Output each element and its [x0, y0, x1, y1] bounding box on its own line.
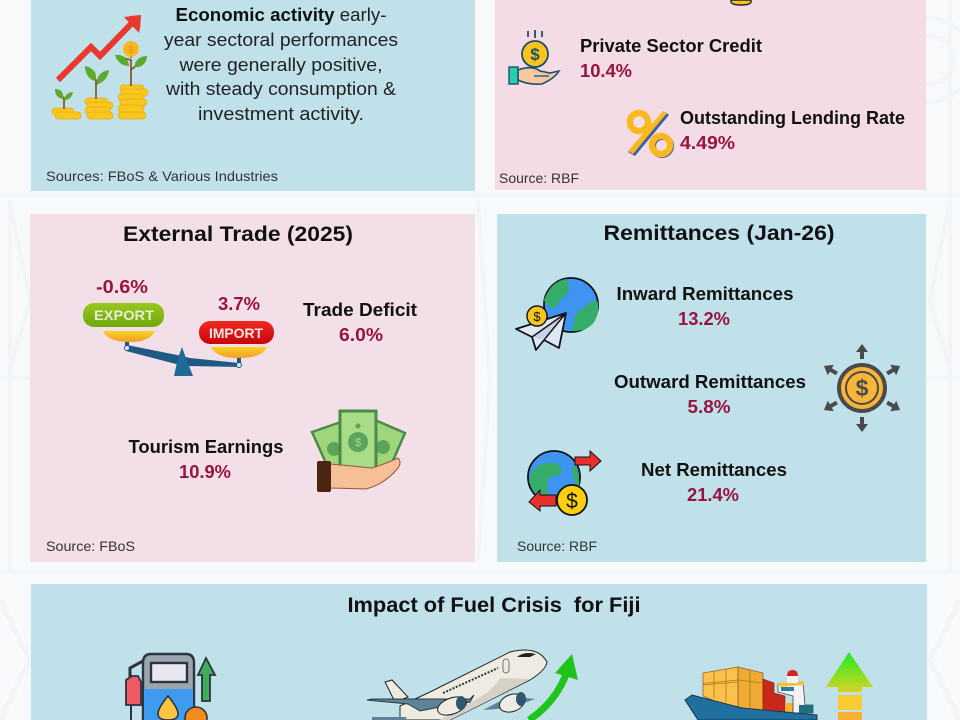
heading: remittances: Remittances (Jan-26) [604, 222, 834, 245]
icon: coin stack fragment [731, 0, 751, 5]
icon: growth arrow with coin plants: $ [128, 45, 134, 56]
stat: trade deficit: 6.0% [339, 325, 383, 345]
text: economic activity summary: Economic activity early- [176, 5, 386, 25]
stat: inward remittances: 13.2% [678, 309, 730, 329]
icon: globe with exchange arrows: $ [566, 490, 578, 513]
icon: fuel pump with rising price [126, 654, 215, 720]
icon: hand holding coin: $ [530, 45, 540, 64]
stat: private sector credit: 10.4% [580, 61, 632, 81]
stat: outward remittances: 5.8% [688, 397, 730, 417]
panel: economic activity [31, 0, 475, 191]
icon: globe with paper plane: $ [533, 309, 541, 324]
source note: Source: FBoS [46, 538, 135, 554]
text: economic activity summary: with steady consumption & [165, 79, 396, 99]
panel: credit and lending [495, 0, 926, 190]
stat: import change: 3.7% [218, 294, 260, 314]
stat: tourism earnings [128, 437, 284, 482]
stat: net remittances: Net Remittances [641, 460, 787, 480]
stat: outstanding lending rate [680, 108, 905, 153]
icon: growth arrow with coin plants [52, 15, 148, 119]
text: economic activity summary: year sectoral performances [164, 30, 398, 50]
source note: Sources: FBoS & Various Industries [46, 168, 278, 184]
chart: export import balance scale: EXPORT [94, 307, 154, 323]
icon: globe with paper plane [516, 278, 598, 350]
stat: outward remittances [614, 372, 806, 417]
stat: trade deficit [303, 300, 417, 345]
icon: coin with outward arrows: $ [856, 375, 869, 401]
text: economic activity summary: investment activity. [198, 104, 364, 124]
stat: outstanding lending rate: Outstanding Lending Rate [680, 108, 905, 128]
icon: globe with exchange arrows [528, 451, 601, 515]
heading: external trade: External Trade (2025) [123, 223, 353, 246]
chart: export import balance scale [83, 303, 274, 376]
stat: export change: -0.6% [96, 277, 148, 297]
panel: impact of fuel crisis [31, 584, 927, 720]
icon: hand holding banknotes [312, 411, 405, 492]
panel: external trade [30, 214, 475, 562]
panel: remittances [497, 214, 926, 562]
icon: airplane with rising arrow [367, 650, 578, 720]
stat: trade deficit: Trade Deficit [303, 300, 417, 320]
icon: hand holding banknotes: $ [355, 437, 361, 449]
text: economic activity summary [164, 5, 398, 124]
icon: container ship with rising arrow [685, 652, 873, 720]
icon: coin with outward arrows [821, 344, 903, 432]
stat: outward remittances: Outward Remittances [614, 372, 806, 392]
stat: inward remittances [616, 284, 794, 329]
chart: export import balance scale: IMPORT [209, 325, 263, 341]
source note: Source: RBF [499, 170, 579, 186]
stat: private sector credit [580, 36, 762, 81]
stat: outstanding lending rate: 4.49% [680, 133, 735, 153]
source note: Source: RBF [517, 538, 597, 554]
stat: tourism earnings: Tourism Earnings [128, 437, 284, 457]
stat: net remittances [641, 460, 787, 505]
stat: net remittances: 21.4% [687, 485, 739, 505]
stat: private sector credit: Private Sector Credit [580, 36, 762, 56]
heading: fuel crisis: Impact of Fuel Crisis for Fiji [348, 594, 640, 617]
stat: tourism earnings: 10.9% [179, 462, 231, 482]
stat: inward remittances: Inward Remittances [616, 284, 794, 304]
icon: hand holding coin [509, 30, 559, 84]
icon: percent sign [628, 111, 671, 156]
text: economic activity summary: were generally positive, [178, 55, 382, 75]
